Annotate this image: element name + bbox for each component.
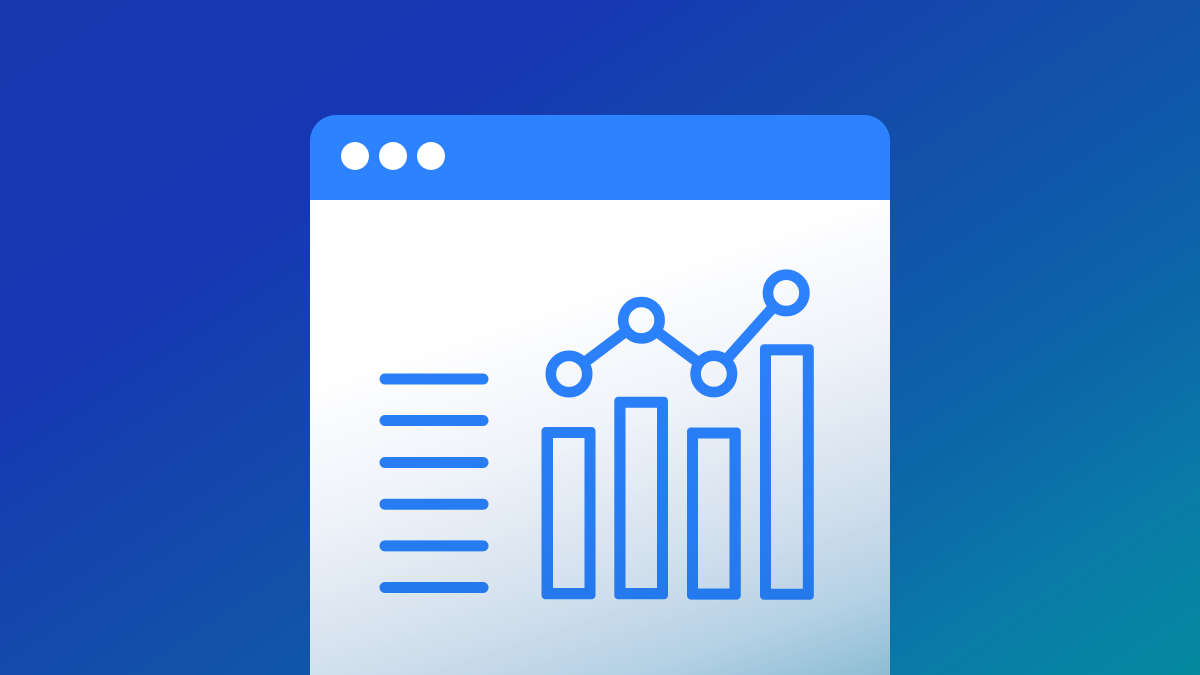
window title bar (310, 115, 890, 200)
list lines (380, 374, 488, 593)
window body (310, 200, 890, 675)
panel: browser window (310, 115, 890, 675)
window control dots (341, 142, 445, 170)
line chart with circular markers (551, 275, 804, 392)
bar chart (542, 344, 814, 600)
